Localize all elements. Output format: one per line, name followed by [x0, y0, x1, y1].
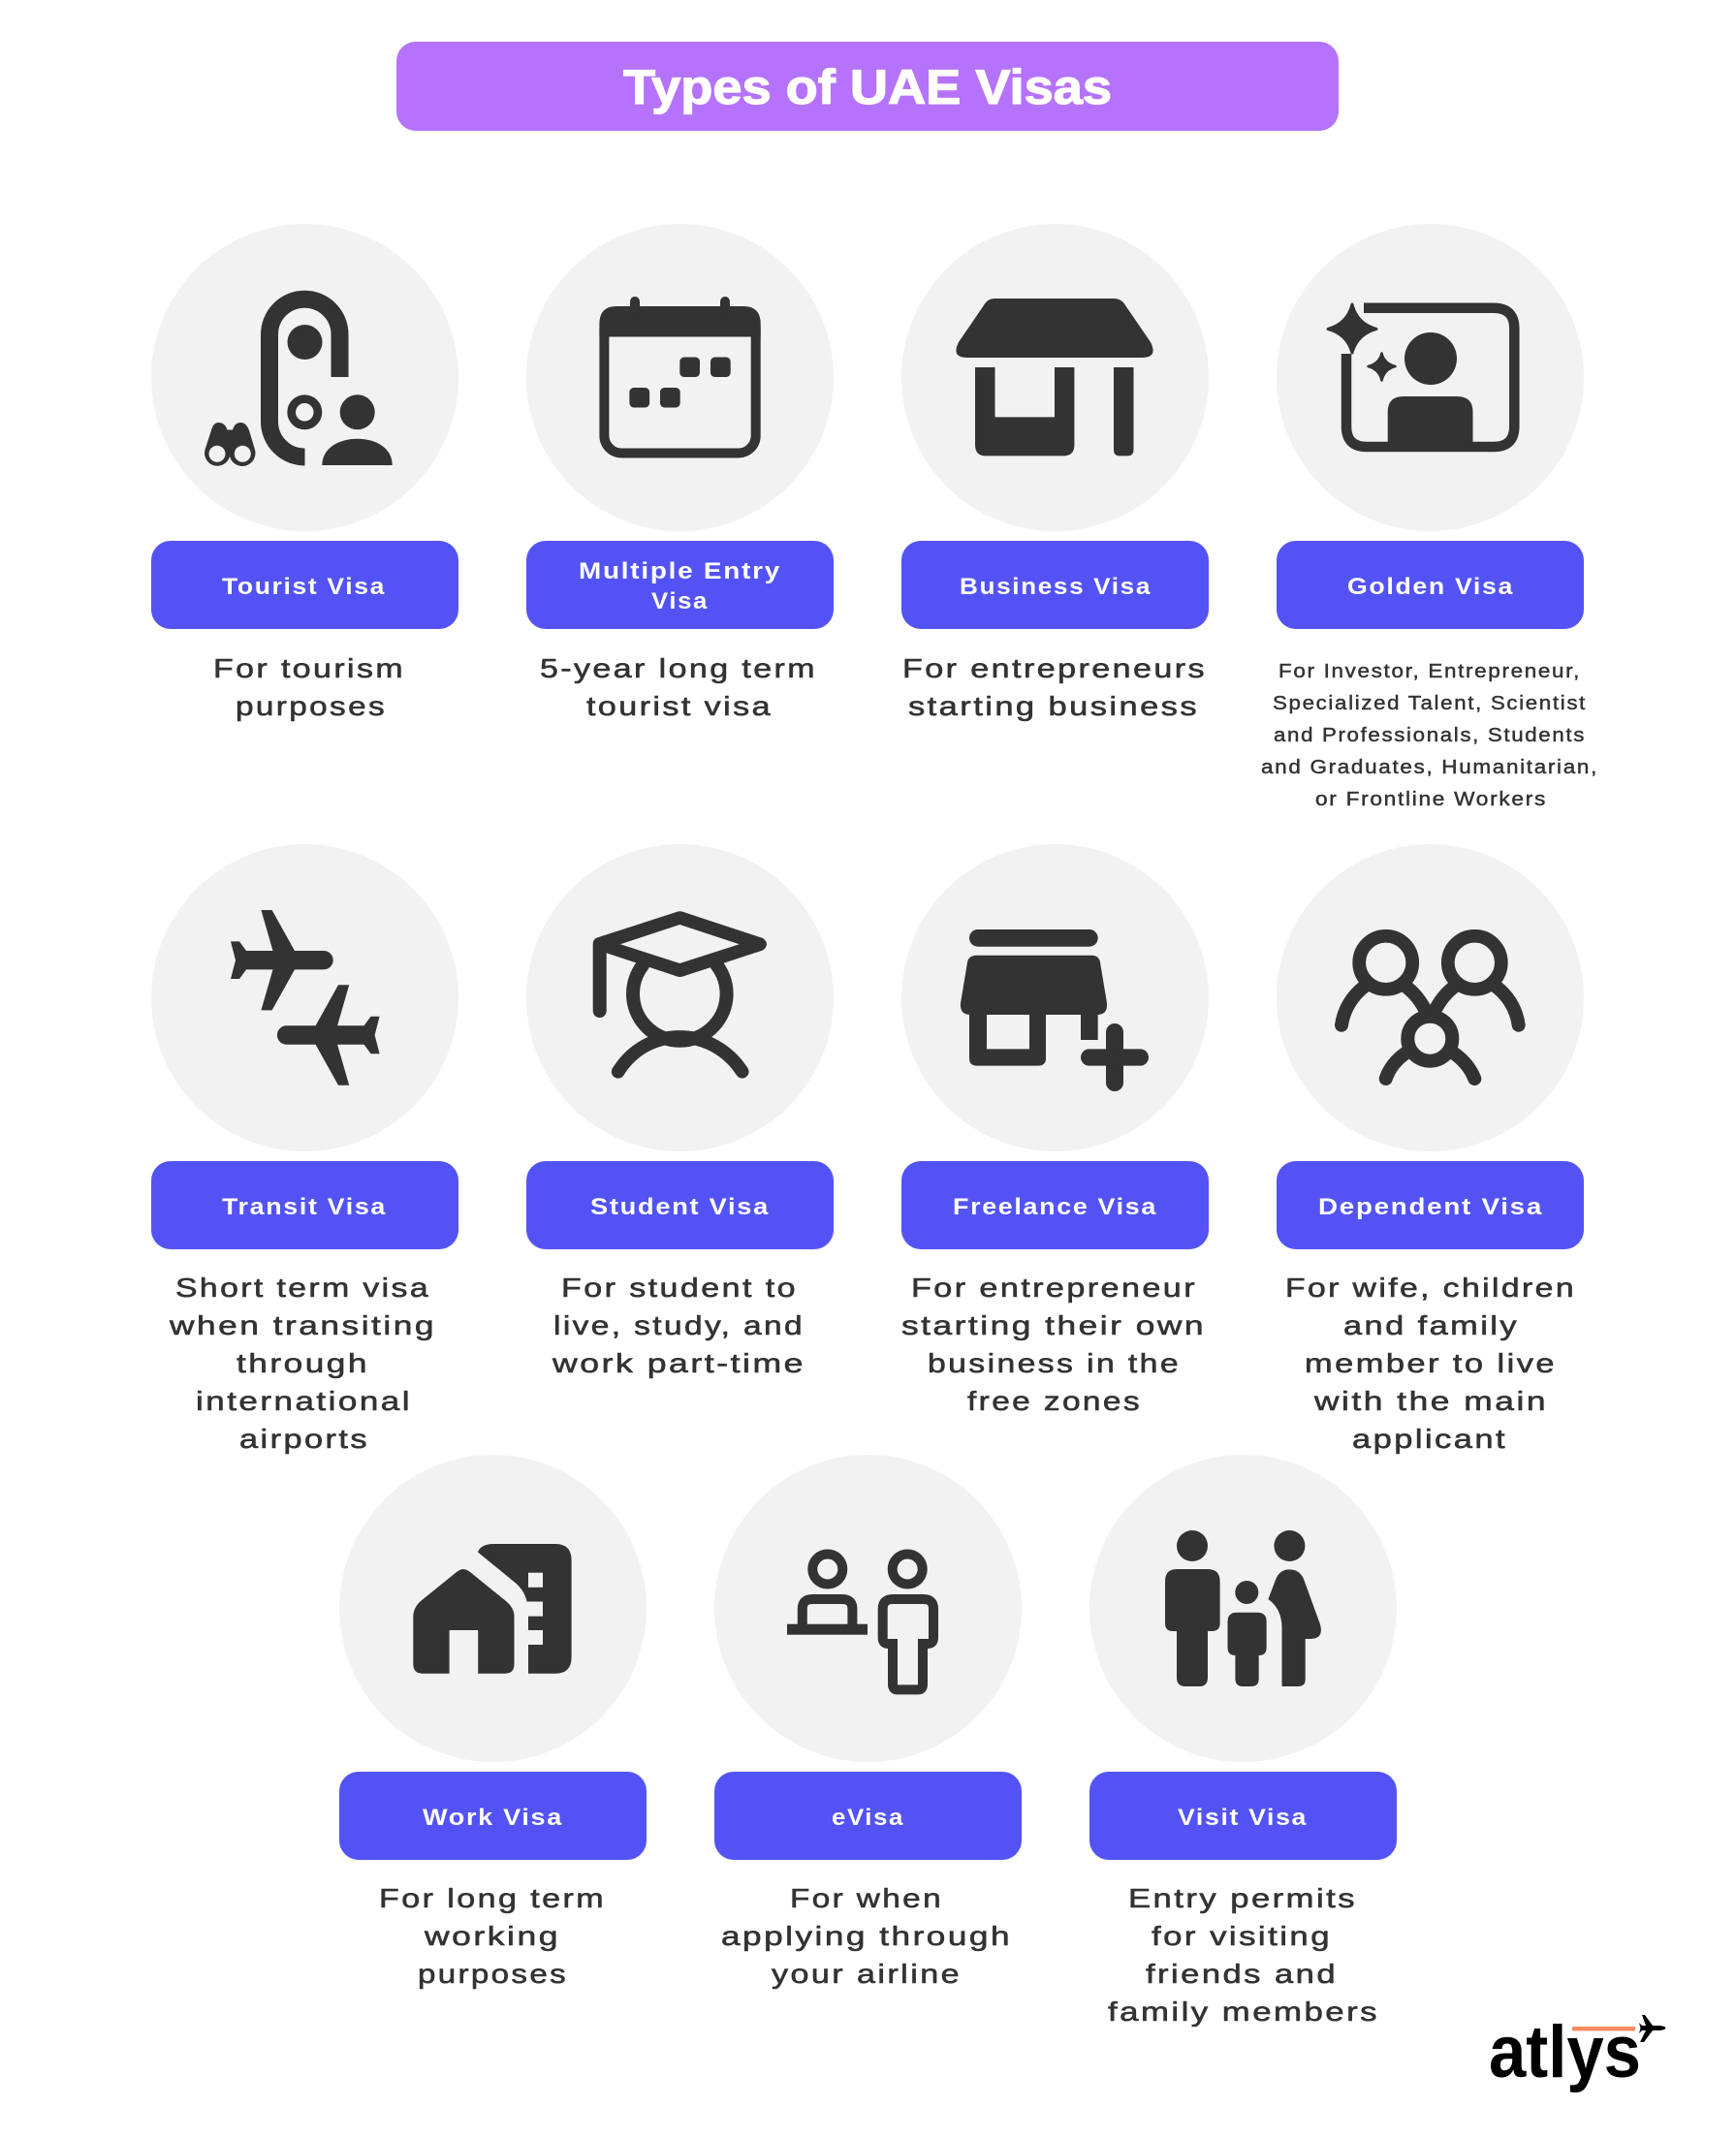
button: dependent visa: Dependent Visa — [1318, 1194, 1543, 1220]
button: business visa: Business Visa — [960, 574, 1152, 600]
icon: shop with plus — [961, 929, 1149, 1091]
icon: two planes — [231, 910, 380, 1085]
button: tourist visa: Tourist Visa — [222, 574, 386, 600]
icon: graduate with cap — [593, 911, 767, 1072]
icon: house and office building — [413, 1544, 572, 1674]
description: golden visa: and Graduates, Humanitarian, — [1261, 757, 1598, 778]
panel: visit visa — [1089, 1455, 1397, 2027]
icon: family silhouette — [1165, 1530, 1321, 1686]
description: multiple entry visa — [540, 653, 817, 721]
description: golden visa: For Investor, Entrepreneur, — [1278, 661, 1581, 682]
description: business visa: For entrepreneurs — [902, 653, 1207, 683]
description: golden visa — [1261, 661, 1598, 810]
description: tourist visa: purposes — [236, 691, 387, 721]
description: freelance visa: business in the — [928, 1348, 1181, 1378]
panel: multiple entry visa — [526, 224, 834, 721]
description: golden visa: Specialized Talent, Scientist — [1273, 693, 1587, 714]
description: evisa: your airline — [772, 1959, 962, 1989]
panel: evisa — [714, 1455, 1022, 1989]
panel: business visa — [901, 224, 1209, 721]
button: work visa — [339, 1772, 647, 1860]
description: multiple entry visa: 5-year long term — [540, 653, 817, 683]
button: work visa: Work Visa — [423, 1805, 563, 1831]
description: transit visa — [169, 1273, 436, 1454]
description: transit visa: when transiting — [169, 1310, 436, 1340]
button: dependent visa — [1277, 1161, 1584, 1249]
button: transit visa — [151, 1161, 458, 1249]
description: dependent visa — [1285, 1273, 1576, 1454]
button: golden visa — [1277, 541, 1584, 629]
description: multiple entry visa: tourist visa — [586, 691, 773, 721]
icon: tourist with binoculars — [205, 299, 393, 466]
button: visit visa — [1089, 1772, 1397, 1860]
description: transit visa: international — [196, 1386, 412, 1416]
description: work visa: purposes — [418, 1959, 568, 1989]
panel: dependent visa — [1277, 844, 1584, 1454]
button: evisa — [714, 1772, 1022, 1860]
panel: work visa — [339, 1455, 647, 1989]
panel: tourist visa — [151, 224, 458, 721]
description: visit visa: friends and — [1146, 1959, 1338, 1989]
description: visit visa: for visiting — [1152, 1921, 1332, 1951]
description: work visa — [379, 1883, 606, 1989]
description: visit visa: Entry permits — [1128, 1883, 1357, 1913]
icon: calendar — [599, 297, 761, 454]
description: student visa — [552, 1273, 805, 1378]
description: evisa: applying through — [721, 1921, 1012, 1951]
description: work visa: working — [424, 1921, 560, 1951]
description: transit visa: through — [237, 1348, 369, 1378]
title: Types of UAE Visas — [623, 60, 1112, 114]
description: visit visa — [1108, 1883, 1379, 2027]
description: dependent visa: member to live — [1305, 1348, 1557, 1378]
button: transit visa: Transit Visa — [222, 1194, 387, 1220]
description: visit visa: family members — [1108, 1997, 1379, 2027]
logo: atlys: atlys — [1489, 2011, 1641, 2093]
description: business visa: starting business — [908, 691, 1199, 721]
button: evisa: eVisa — [832, 1805, 904, 1831]
description: business visa — [902, 653, 1207, 721]
button: multiple entry visa: Multiple Entry — [579, 558, 781, 584]
description: student visa: live, study, and — [553, 1310, 805, 1340]
description: tourist visa — [213, 653, 405, 721]
button: freelance visa: Freelance Visa — [953, 1194, 1157, 1220]
description: evisa — [721, 1883, 1012, 1989]
description: evisa: For when — [790, 1883, 943, 1913]
description: freelance visa: For entrepreneur — [911, 1273, 1197, 1303]
button: visit visa: Visit Visa — [1178, 1805, 1308, 1831]
description: freelance visa: starting their own — [901, 1310, 1206, 1340]
description: work visa: For long term — [379, 1883, 606, 1913]
button: student visa — [526, 1161, 834, 1249]
description: dependent visa: applicant — [1352, 1424, 1507, 1454]
button: multiple entry visa: Visa — [651, 588, 709, 614]
button: multiple entry visa — [526, 541, 834, 629]
panel: transit visa — [151, 844, 458, 1454]
panel: freelance visa — [901, 844, 1209, 1416]
description: dependent visa: and family — [1343, 1310, 1519, 1340]
description: student visa: work part-time — [552, 1348, 805, 1378]
description: golden visa: and Professionals, Students — [1274, 725, 1586, 746]
icon: storefront — [956, 299, 1153, 456]
description: dependent visa: with the main — [1313, 1386, 1548, 1416]
description: golden visa: or Frontline Workers — [1315, 789, 1547, 810]
icon: family group outline — [1341, 936, 1519, 1079]
icon: portrait with sparkles — [1328, 304, 1514, 452]
description: freelance visa — [901, 1273, 1206, 1416]
button: student visa: Student Visa — [590, 1194, 770, 1220]
button: tourist visa — [151, 541, 458, 629]
button: business visa — [901, 541, 1209, 629]
button: golden visa: Golden Visa — [1347, 574, 1514, 600]
panel: golden visa — [1261, 224, 1598, 810]
panel: student visa — [526, 844, 834, 1378]
button: freelance visa — [901, 1161, 1209, 1249]
description: student visa: For student to — [561, 1273, 798, 1303]
title — [396, 42, 1339, 131]
icon: agent at desk and traveller — [787, 1555, 933, 1689]
description: dependent visa: For wife, children — [1285, 1273, 1576, 1303]
description: tourist visa: For tourism — [213, 653, 405, 683]
description: transit visa: airports — [239, 1424, 369, 1454]
description: transit visa: Short term visa — [175, 1273, 430, 1303]
description: freelance visa: free zones — [967, 1386, 1142, 1416]
